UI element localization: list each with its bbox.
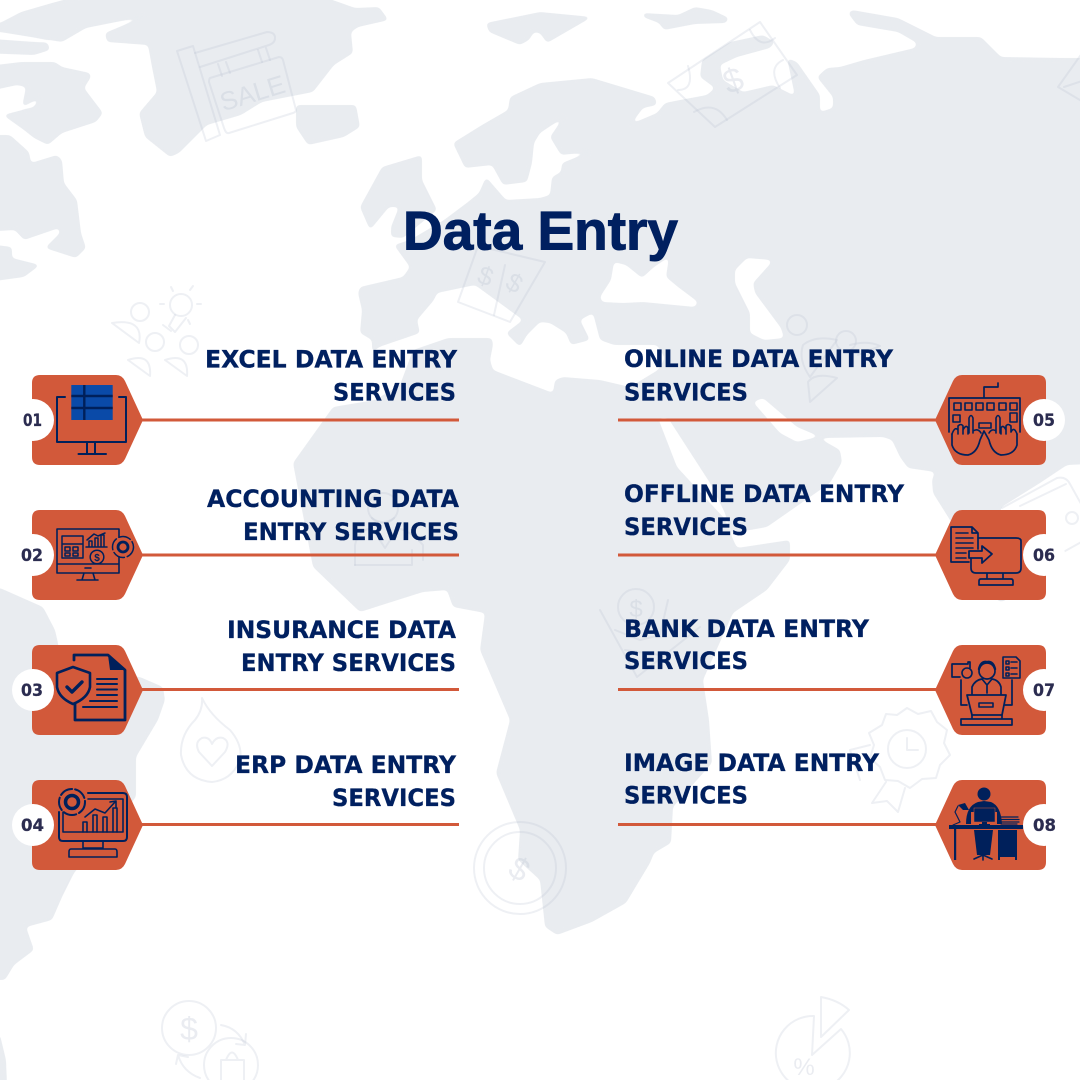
- number badge 01: 01: [23, 411, 42, 430]
- orange hexagon 08: [935, 780, 1046, 870]
- orange hexagon 01: [32, 375, 143, 465]
- icon: insurance document and shield: [57, 655, 125, 720]
- faint icon: pie chart: [776, 997, 850, 1080]
- orange hexagon 05: [935, 375, 1046, 465]
- icon: erp monitor and chart: [59, 789, 127, 857]
- icon: accounting monitor: [57, 529, 134, 580]
- number badge 05: 05: [1033, 411, 1055, 430]
- label 06: SERVICES: [624, 513, 748, 541]
- orange hexagon 07: [935, 645, 1046, 735]
- number badge 04: [12, 804, 54, 846]
- orange hexagon 04: [32, 780, 143, 870]
- item 06: offline data entry services: [618, 480, 1065, 600]
- faint icon: money and shopping bag: [162, 1001, 258, 1080]
- label 06: [624, 480, 905, 541]
- item 05: online data entry services: [618, 345, 1065, 465]
- faint icon: award badge: [850, 708, 950, 812]
- icon: spreadsheet monitor: [57, 385, 126, 454]
- faint icon: corner note: [1058, 42, 1080, 106]
- connector line 03: [140, 688, 459, 691]
- label 05: [624, 345, 894, 406]
- connector line 06: [618, 554, 938, 556]
- label 01: SERVICES: [333, 379, 456, 407]
- faint icon: banknotes: $: [474, 259, 498, 293]
- label 02: [207, 485, 459, 546]
- icon: operator at laptop: [952, 657, 1020, 725]
- item 01: excel data entry services: [12, 346, 459, 465]
- label 08: [624, 749, 880, 810]
- label 05: SERVICES: [624, 378, 748, 406]
- number badge 05: [1023, 399, 1065, 441]
- orange hexagon 02: [32, 510, 143, 600]
- icon: accounting monitor: $: [94, 553, 100, 564]
- connector line 02: [140, 554, 459, 556]
- label 02: ACCOUNTING DATA: [207, 485, 459, 513]
- faint icon: coin: [474, 822, 566, 914]
- number badge 06: 06: [1033, 546, 1055, 565]
- number badge 07: [1023, 669, 1065, 711]
- item 04: erp data entry services: [12, 751, 459, 870]
- number badge 08: 08: [1033, 816, 1056, 835]
- number badge 03: 03: [21, 681, 43, 700]
- faint icon: dollar bill top: $: [718, 60, 749, 102]
- label 08: IMAGE DATA ENTRY: [624, 749, 880, 777]
- faint icon: wallet: [1002, 478, 1080, 565]
- orange hexagon 06: [935, 510, 1046, 600]
- number badge 04: 04: [21, 816, 44, 835]
- label 05: ONLINE DATA ENTRY: [624, 345, 894, 373]
- label 01: EXCEL DATA ENTRY: [205, 346, 458, 374]
- label 03: [227, 616, 456, 677]
- faint icon: banknotes: [458, 246, 545, 322]
- faint icon: flame heart: [181, 698, 241, 782]
- label 03: ENTRY SERVICES: [241, 649, 456, 677]
- label 04: SERVICES: [332, 784, 456, 812]
- number badge 02: [12, 534, 54, 576]
- number badge 01: [12, 399, 54, 441]
- title: Data Entry: [403, 200, 678, 262]
- orange hexagon 03: [32, 645, 143, 735]
- item 08: image data entry services: [618, 749, 1065, 870]
- icon: person at desk: [949, 788, 1023, 860]
- label 08: SERVICES: [624, 782, 748, 810]
- faint icon: money and shopping bag: $: [180, 1011, 198, 1047]
- faint icon: coin and hand: $: [629, 596, 643, 623]
- item 03: insurance data entry services: [12, 616, 459, 735]
- label 07: SERVICES: [624, 647, 748, 675]
- number badge 02: 02: [21, 546, 43, 565]
- label 07: [624, 615, 870, 675]
- faint icon: coin: $: [503, 849, 536, 889]
- faint icon: dollar bill top: [668, 22, 797, 127]
- label 01: [205, 346, 458, 407]
- connector line 07: [618, 688, 938, 691]
- faint icon: banknotes: $: [501, 266, 529, 300]
- label 04: ERP DATA ENTRY: [235, 751, 457, 779]
- number badge 07: 07: [1033, 681, 1055, 700]
- faint icon: person: [355, 493, 423, 565]
- label 02: ENTRY SERVICES: [243, 518, 459, 546]
- label 03: INSURANCE DATA: [227, 616, 456, 644]
- number badge 03: [12, 669, 54, 711]
- icon: hands on keyboard: [949, 383, 1020, 455]
- label 07: BANK DATA ENTRY: [624, 615, 870, 643]
- item 07: bank data entry services: [618, 615, 1065, 735]
- connector line 01: [140, 418, 459, 422]
- connector line 08: [618, 823, 938, 826]
- connector line 05: [618, 418, 938, 422]
- label 04: [235, 751, 457, 812]
- faint icon: sale sign: [177, 32, 296, 141]
- faint icon: lightbulb ideas: [112, 286, 201, 376]
- faint icon: team leaves: [787, 315, 880, 402]
- connector line 04: [140, 823, 459, 826]
- faint icon: sale sign: SALE: [216, 69, 289, 117]
- number badge 08: [1023, 804, 1065, 846]
- label 06: OFFLINE DATA ENTRY: [624, 480, 905, 508]
- icon: document to monitor: [951, 527, 1021, 585]
- item 02: accounting data entry services: [12, 485, 459, 600]
- number badge 06: [1023, 534, 1065, 576]
- faint icon: coin and hand: [600, 589, 700, 677]
